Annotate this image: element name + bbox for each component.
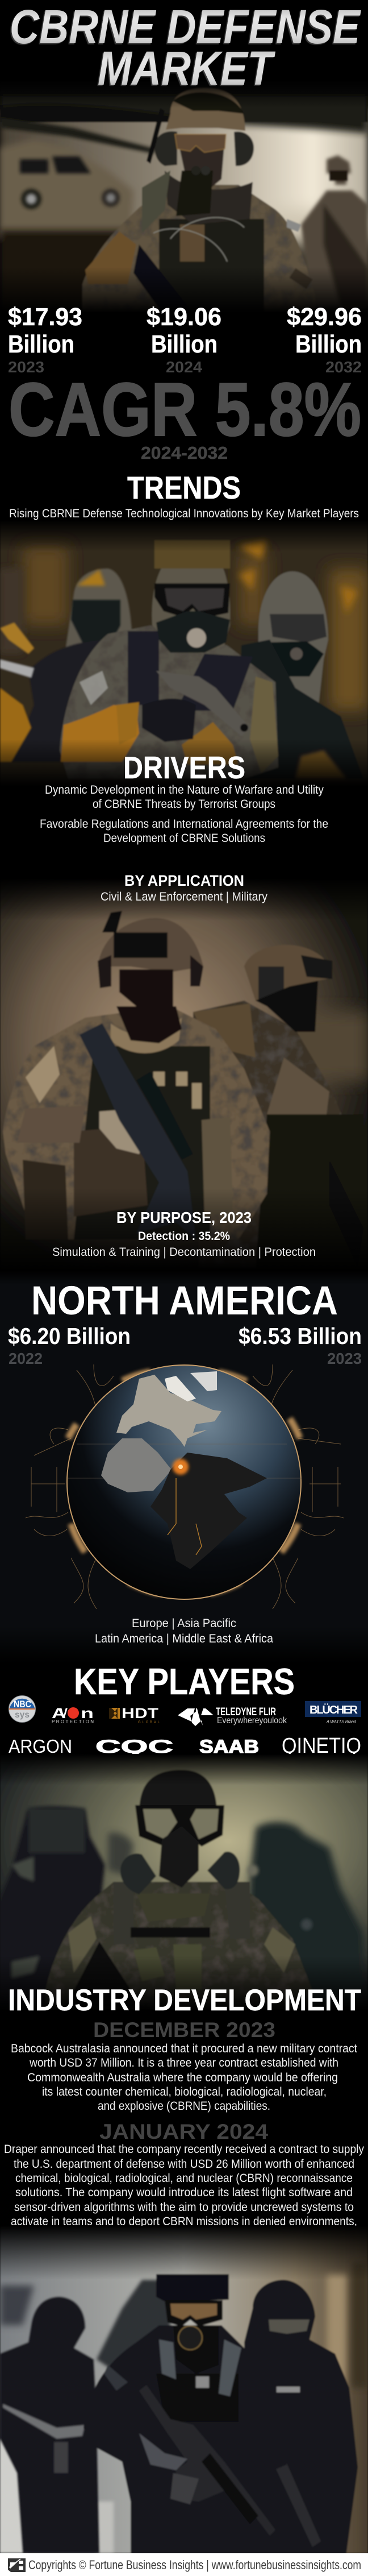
left soldier [65,569,132,651]
market values [8,303,362,376]
panel: north america [0,1271,368,1663]
January 2024 text [4,2143,364,2242]
blurred right soldiers [244,1822,363,2007]
panel: gas mask photo [0,1754,368,2010]
right soldier [258,571,328,711]
rear soldier [192,1000,342,1253]
north america heading: NORTH AMERICA [31,1279,338,1324]
2023 value: Billion [8,330,74,358]
drivers heading: DRIVERS [123,750,245,785]
January 2024 text: solutions. The company would introduce its latest flight software and [15,2186,353,2199]
December 2023 text [11,2042,357,2113]
2023 value: 2023 [8,358,44,376]
photo: gas mask soldiers [0,520,368,786]
December 2023 text: worth USD 37 Million. It is a three year contract established with [29,2056,338,2069]
application segment: Civil & Law Enforcement | Military [101,890,267,903]
logo: Argon: ARGON [9,1736,72,1757]
purpose segment: BY PURPOSE, 2023 [116,1209,252,1226]
logo: Avon Protection [52,1706,94,1724]
logo: Teledyne FLIR [178,1706,287,1726]
2023 value [8,303,82,376]
2032 value [287,303,362,376]
other regions: Latin America | Middle East & Africa [95,1632,273,1645]
logo: Teledyne FLIR: Everywhereyoulook [217,1716,287,1725]
panel: key players [9,1661,361,1758]
dark landmass [150,1453,267,1569]
title [10,0,362,95]
CAGR: 2024-2032 [141,443,228,463]
footer [0,2553,368,2576]
purpose segment: Detection : 35.2% [138,1230,230,1243]
hero photo: soldier and helicopter [0,80,368,313]
photo: two soldiers [0,878,368,1271]
2023 value: $17.93 [8,303,82,331]
key players heading: KEY PLAYERS [74,1661,295,1702]
icon: Fortune Business Insights logo [8,2558,26,2572]
rifle [80,1023,196,1239]
logo: QinetiQ: QINETIQ [282,1734,361,1758]
logo: Avon Protection: A [52,1706,66,1722]
head [116,1006,182,1043]
tendrils [26,1364,344,1609]
panel: industry development [4,1984,364,2242]
center soldier [83,2325,287,2553]
back soldier [97,2280,170,2371]
hero top fade [0,80,368,108]
globe [26,1364,344,1609]
other regions: Europe | Asia Pacific [132,1617,236,1630]
footer band [0,2553,368,2576]
application segment: BY APPLICATION [124,872,244,889]
2023 value: 2023 [327,1350,362,1367]
December 2023 text: and explosive (CBRNE) capabilities. [98,2100,270,2113]
2024 value: $19.06 [147,303,221,331]
panel: drivers [40,750,328,845]
2022 value: 2022 [9,1350,43,1367]
silver landmass [101,1438,172,1492]
drivers photo top fade [0,520,368,551]
photo: tactical team [0,2226,368,2553]
rifle [139,2385,275,2536]
soldiers photo top fade [0,878,368,921]
logo: Blucher: A WATTS Brand [326,1719,356,1724]
panel: drivers photo [0,520,368,786]
main soldier torso [82,185,315,313]
logo: Blucher [305,1701,361,1724]
driver two: Development of CBRNE Solutions [103,832,265,845]
space bottom fade [0,1626,368,1663]
January 2024 heading: JANUARY 2024 [99,2120,268,2143]
north america landmass [116,1375,221,1447]
left soldier [0,2297,99,2553]
2024 value [147,303,221,376]
head [179,146,225,187]
2032 value: 2032 [325,358,362,376]
January 2024 text: including areas without GPS. [115,2229,253,2242]
driver one: of CBRNE Threats by Terrorist Groups [93,798,275,811]
space top fade [0,1271,368,1285]
panel: trends [9,470,359,520]
panel: tactical team photo [0,2226,368,2553]
gas mask photo top fade [0,1754,368,1785]
greenland [190,1371,217,1391]
dark space background [0,1271,368,1663]
logo: Saab: SAAB [199,1736,259,1757]
logo: NBC sys: sys [15,1710,30,1720]
title: MARKET [98,42,276,95]
2023 value [239,1323,362,1367]
glow ring [68,1371,300,1595]
2022 value: $6.20 Billion [8,1323,131,1349]
driver two [40,818,328,845]
logo: Avon Protection: V [60,1706,68,1722]
December 2023 heading: DECEMBER 2023 [93,2018,275,2042]
application segment [101,872,267,903]
logo: NBC sys: NBC [14,1699,31,1710]
logo: Avon Protection: n [81,1706,94,1722]
December 2023 text: its latest counter chemical, biological, radiological, nuclear, [42,2085,327,2098]
helmet and goggles [139,1770,217,1814]
purpose segment: Simulation & Training | Decontamination | Protection [52,1246,316,1259]
purpose segment [52,1209,316,1259]
tactical team top fade [0,2226,368,2280]
soldiers photo bottom fade [0,1188,368,1271]
logo: Blucher: BLÜCHER [310,1703,358,1716]
driver one: Dynamic Development in the Nature of Warfare and Utility [45,783,324,797]
panel: soldiers photo [0,878,368,1271]
December 2023 text: Commonwealth Australia where the company would be offering [27,2071,338,2084]
center soldier [60,625,278,779]
blurred left soldier [0,1807,105,2007]
panel: hero [0,80,368,313]
front soldier torso [3,1006,270,1239]
gas mask photo bottom fade [0,1956,368,2010]
photo: gas mask soldiers [0,1754,368,2010]
2022 value [8,1323,131,1367]
hero bottom fade [0,267,368,313]
right soldier [244,2280,358,2553]
driver two: Favorable Regulations and International Agreements for the [40,818,328,831]
logo: HDT Global [109,1706,160,1724]
2024 value: Billion [151,330,218,358]
center soldier torso [45,1882,312,2010]
2032 value: $29.96 [287,303,362,331]
drivers photo fade [0,739,368,786]
logo: NBC sys [9,1695,35,1723]
2024 value: 2024 [166,358,202,376]
logo: HDT Global: GLOBAL [138,1721,160,1724]
driver one [45,783,324,811]
logo: Teledyne FLIR: TELEDYNE FLIR [216,1706,276,1718]
trends heading: TRENDS [127,470,241,505]
logo: HDT Global: HDT [122,1706,158,1722]
right soldier [299,153,368,282]
yellow sleeves [61,705,139,762]
logo: Avon Protection: PROTECTION [52,1719,94,1724]
logo: CQC: CQC [95,1736,173,1757]
other regions [95,1617,273,1645]
